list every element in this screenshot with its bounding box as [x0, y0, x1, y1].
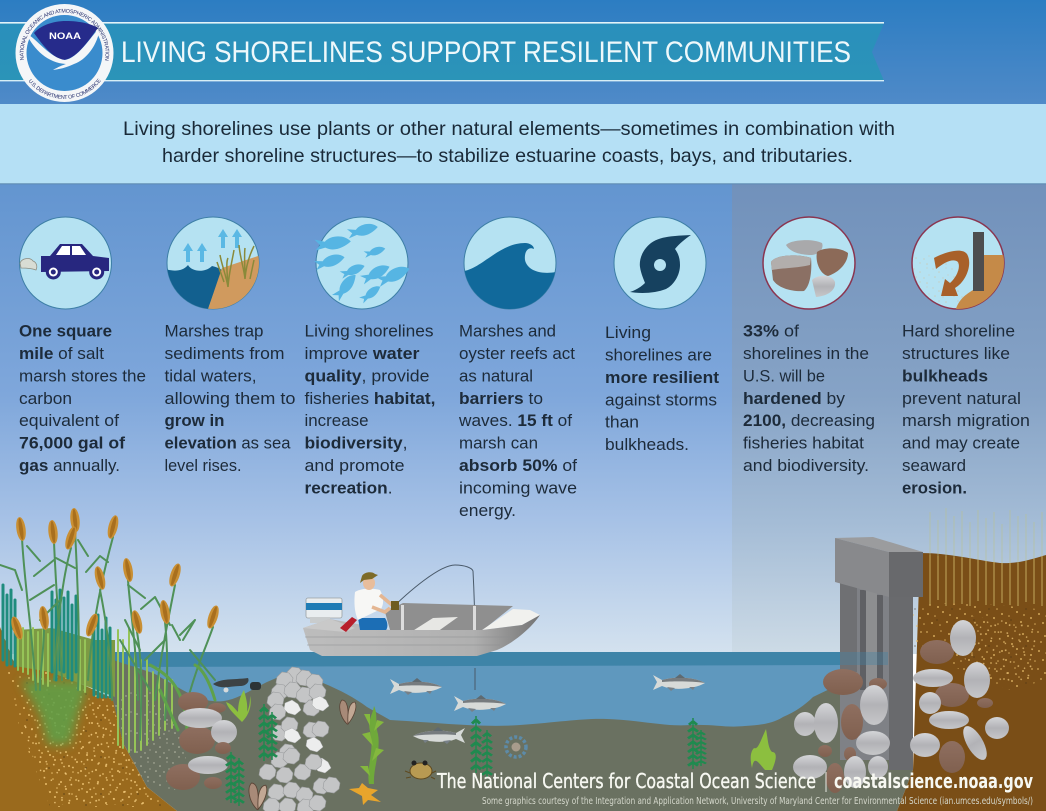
starfish	[349, 783, 381, 805]
header banner	[0, 0, 1046, 104]
fishing rod and line	[387, 565, 475, 690]
text: storm resilience: shorelines are	[605, 346, 712, 364]
text: bulkhead erosion: erosion.	[902, 478, 967, 497]
text: carbon storage: mile of salt	[19, 344, 104, 363]
text: water quality: quality, provide	[304, 366, 430, 385]
icon: car	[20, 217, 112, 309]
title: LIVING SHORELINES SUPPORT RESILIENT COMMUNITIES	[121, 36, 851, 69]
text: water quality: fisheries habitat,	[304, 389, 436, 408]
footer credit	[436, 769, 1033, 807]
left shore rocks	[166, 692, 237, 790]
text: carbon storage	[19, 322, 146, 475]
NOAA logo: NOAA	[49, 31, 81, 42]
text: hardened shorelines: fisheries habitat	[743, 434, 864, 453]
intro panel: harder shoreline structures—to stabilize estuarine coasts, bays, and tributaries.	[162, 145, 853, 167]
text: water quality: Living shorelines	[304, 322, 434, 340]
footer credit: The National Centers for Coastal Ocean Science	[436, 769, 816, 793]
text: sediment trapping: Marshes trap	[164, 322, 264, 340]
text: sediment trapping: elevation as sea	[164, 434, 291, 453]
outboard motor	[306, 598, 342, 623]
oyster reef	[259, 667, 340, 811]
bank marsh grass	[930, 508, 1042, 606]
text: hardened shorelines: 2100, decreasing	[743, 411, 875, 430]
text: water quality: and promote	[304, 456, 404, 475]
text: sediment trapping: grow in	[164, 411, 224, 430]
submerged green patch	[20, 680, 90, 745]
text: bulkhead erosion: structures like	[902, 344, 1010, 363]
text: wave barriers: Marshes and	[459, 322, 556, 340]
text: sediment trapping: allowing them to	[164, 389, 296, 408]
text: water quality: biodiversity ,	[304, 434, 408, 453]
text: hardened shorelines: U.S. will be	[743, 366, 825, 385]
text: carbon storage: carbon	[19, 389, 72, 408]
left marsh bank	[0, 508, 221, 811]
boat and angler	[303, 565, 540, 690]
text: hardened shorelines: 33% of	[743, 322, 799, 340]
right soil bank	[897, 508, 1046, 811]
text: storm resilience: bulkheads.	[605, 435, 689, 454]
text: hardened shorelines: and biodiversity.	[743, 456, 869, 475]
hull	[303, 615, 540, 656]
text: storm resilience	[605, 323, 719, 454]
text: wave barriers: absorb 50% of	[459, 456, 577, 475]
text: water quality	[304, 322, 436, 497]
text: carbon storage: 76,000 gal of	[19, 434, 125, 453]
logo ring text: U.S. DEPARTMENT OF COMMERCE	[29, 78, 101, 99]
text: hardened shorelines: hardened by	[743, 389, 846, 408]
icon: fish school	[314, 217, 412, 309]
text: hardened shorelines	[743, 322, 875, 475]
fish	[390, 674, 705, 744]
text: carbon storage: One square	[19, 322, 112, 340]
text: bulkhead erosion: and may create	[902, 434, 1020, 453]
text: wave barriers: marsh can	[459, 434, 538, 453]
text: bulkhead erosion: seaward	[902, 456, 966, 475]
text: bulkhead erosion: bulkheads	[902, 366, 988, 385]
angler	[354, 572, 399, 630]
rocks in soil	[910, 620, 1009, 773]
text: storm resilience: against storms	[605, 390, 717, 409]
text: carbon storage: marsh stores the	[19, 366, 146, 385]
text: bulkhead erosion	[902, 322, 1030, 497]
text: bulkhead erosion: prevent natural	[902, 389, 1021, 408]
tackle box	[340, 617, 357, 632]
bulkhead	[835, 537, 923, 770]
reed seed heads	[9, 508, 221, 641]
text: water quality: improve water	[304, 344, 420, 363]
text: water quality: recreation.	[304, 478, 392, 497]
text: wave barriers: waves. 15 ft of	[458, 411, 572, 430]
NOAA logo	[16, 4, 114, 102]
loose oysters	[249, 700, 356, 809]
small dark fish by marsh	[213, 678, 261, 692]
boat interior	[385, 603, 513, 630]
intro text: Living shorelines use plants or other natural elements—sometimes in combination with	[123, 118, 895, 140]
logo ring text: NATIONAL OCEANIC AND ATMOSPHERIC ADMINISTRATION	[20, 8, 110, 61]
water	[110, 652, 850, 744]
text: sediment trapping: level rises.	[164, 456, 242, 475]
text: storm resilience: than	[605, 413, 639, 432]
rocks at bulkhead	[793, 669, 890, 793]
page background sky	[0, 184, 1046, 654]
icon: hardened rocks	[763, 217, 855, 309]
right panel: hardened shorelines background	[732, 184, 1046, 654]
text: wave barriers: barriers to	[459, 389, 543, 408]
sea plants	[226, 690, 776, 806]
text: sediment trapping: tidal waters,	[164, 366, 256, 385]
text: wave barriers: as natural	[459, 366, 533, 385]
text: wave barriers	[458, 322, 577, 520]
anemone	[506, 737, 526, 757]
text: carbon storage: gas annually.	[19, 456, 120, 475]
text: hardened shorelines: shorelines in the	[743, 344, 869, 363]
reed stems and leaves	[0, 530, 215, 740]
marsh grass blades	[0, 530, 215, 752]
marsh backing	[15, 628, 115, 697]
icon: bulkhead erosion	[912, 217, 1005, 312]
text: bulkhead erosion: Hard shoreline	[902, 322, 1015, 340]
icon: hurricane	[614, 217, 706, 309]
text: water quality: increase	[304, 411, 368, 430]
text: sediment trapping	[164, 322, 296, 475]
sediment bottom	[113, 640, 913, 811]
text: wave barriers: oyster reefs act	[459, 344, 575, 363]
crab	[405, 760, 436, 779]
text: storm resilience: more resilient	[605, 368, 719, 387]
text: wave barriers: incoming wave	[459, 478, 577, 497]
text: storm resilience: Living	[605, 323, 651, 342]
icon: wave	[464, 217, 556, 310]
logo ring text	[20, 8, 110, 99]
text: carbon storage: equivalent of	[19, 411, 119, 430]
intro panel	[0, 104, 1046, 184]
text: sediment trapping: sediments from	[164, 344, 284, 363]
text: bulkhead erosion: marsh migration	[902, 411, 1030, 430]
text: wave barriers: energy.	[459, 501, 516, 520]
icon: rising marsh	[165, 217, 261, 312]
